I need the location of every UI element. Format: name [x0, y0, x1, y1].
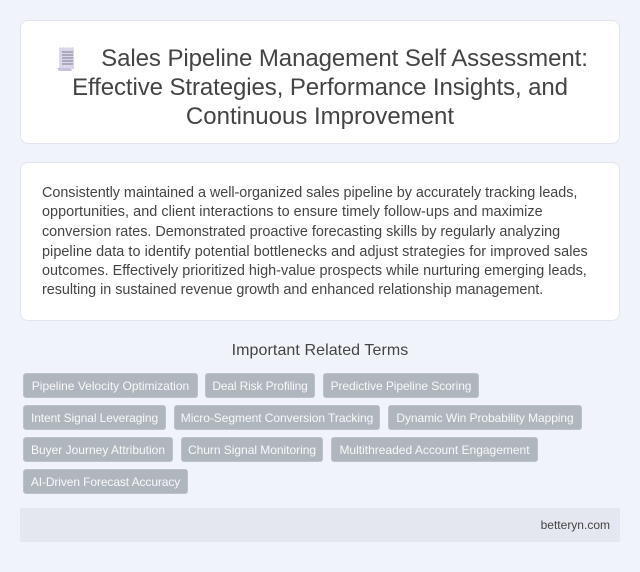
text line 6: resulting in sustained revenue growth and enhanced relationship management. — [42, 282, 543, 298]
tag — [388, 405, 582, 430]
tag: Buyer Journey Attribution — [31, 443, 165, 457]
tag: Dynamic Win Probability Mapping — [396, 411, 574, 425]
tag — [205, 373, 315, 398]
tag: Multithreaded Account Engagement — [339, 443, 530, 457]
tag: Intent Signal Leveraging — [31, 411, 158, 425]
tag — [181, 437, 323, 462]
tag: Micro-Segment Conversion Tracking — [181, 411, 373, 425]
tag — [23, 469, 188, 494]
tag group: related terms — [23, 373, 582, 494]
tag — [331, 437, 538, 462]
footer credit: betteryn.com — [541, 518, 610, 532]
tag — [23, 437, 173, 462]
tag — [23, 373, 198, 398]
tag — [23, 405, 166, 430]
tag — [323, 373, 479, 398]
text line 3: conversion rates. Demonstrated proactive forecasting skills by regularly analyzing — [42, 224, 560, 240]
heading line 1: Sales Pipeline Management Self Assessment: — [101, 45, 588, 72]
text line 4: pipeline data to identify potential bottlenecks and adjust strategies for improved sales — [42, 244, 588, 260]
tag — [174, 405, 380, 430]
heading line 2: Effective Strategies, Performance Insights, and — [72, 74, 568, 101]
tag: AI-Driven Forecast Accuracy — [31, 475, 180, 489]
heading line 3: Continuous Improvement — [186, 103, 454, 130]
text line 1: Consistently maintained a well-organized sales pipeline by accurately tracking leads, — [42, 185, 577, 201]
tag: Churn Signal Monitoring — [188, 443, 316, 457]
tag: Deal Risk Profiling — [212, 379, 308, 393]
text line 5: outcomes. Effectively prioritized high-value prospects while nurturing emerging leads, — [42, 263, 587, 279]
panel: title card — [20, 20, 620, 144]
icon: scroll document — [57, 47, 74, 71]
text line 2: opportunities, and client interactions to ensure timely follow-ups and maximize — [42, 204, 543, 220]
tag: Predictive Pipeline Scoring — [331, 379, 471, 393]
footer bar — [20, 508, 620, 542]
tag: Pipeline Velocity Optimization — [32, 379, 189, 393]
section heading: related terms: Important Related Terms — [232, 342, 408, 359]
panel: summary card — [20, 162, 620, 321]
